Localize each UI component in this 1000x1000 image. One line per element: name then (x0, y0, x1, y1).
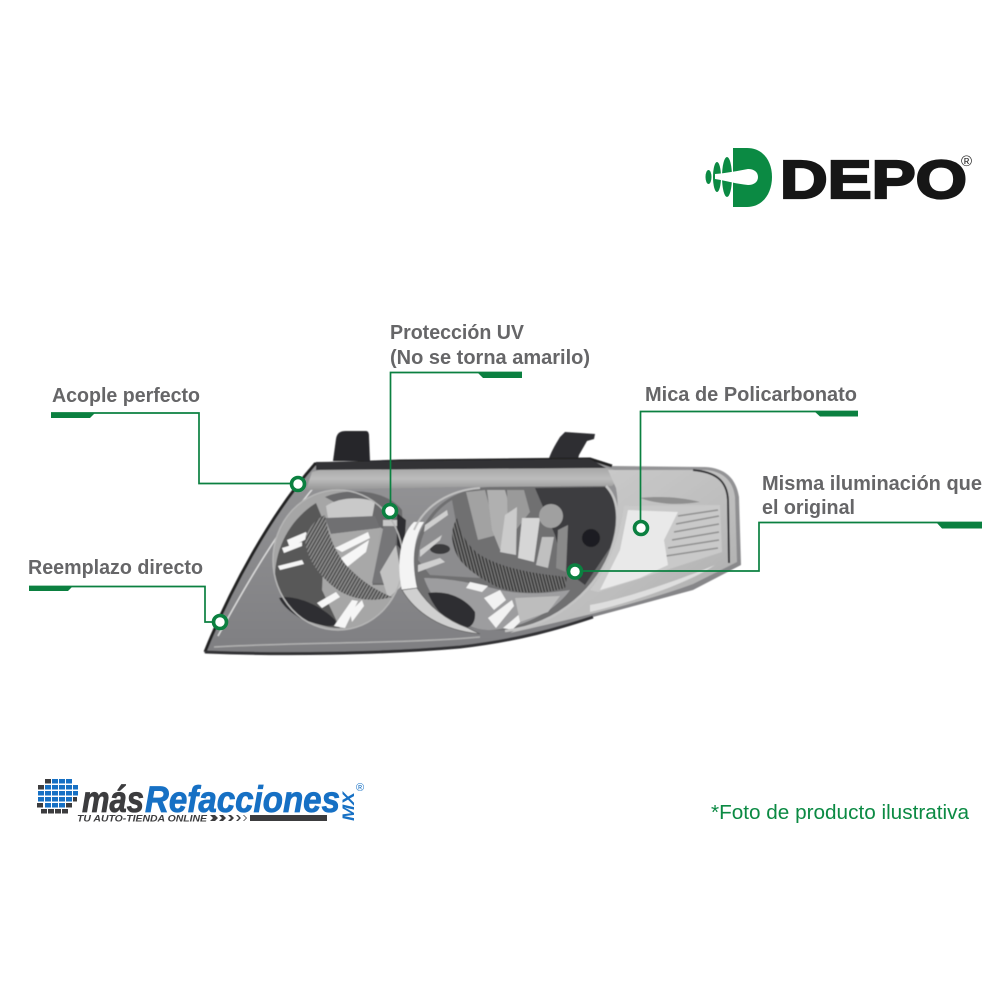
marker dot (292, 478, 304, 490)
callout: Misma iluminación (568, 473, 982, 578)
left right-side dark (397, 513, 406, 553)
callout: Protección UV (384, 322, 590, 518)
logo: masRefacciones (37, 779, 364, 824)
headlight photo illustration (204, 431, 741, 654)
callout label: Protección UV (390, 322, 525, 344)
leader line (640, 412, 858, 522)
right lower grey sheen (515, 596, 560, 622)
corner lens highlight (600, 510, 678, 590)
right fluted arc (452, 518, 567, 593)
marker dot (568, 565, 582, 578)
thick accent (29, 586, 73, 591)
registered mark: ® (961, 153, 972, 170)
right lower reflector (424, 578, 570, 630)
left reflector bowl (273, 490, 403, 630)
callout label: Acople perfecto (52, 385, 200, 407)
leader line (29, 586, 215, 622)
mounting tab: right (548, 432, 595, 463)
chrome ring (399, 522, 424, 590)
mottled light streaks (418, 510, 448, 572)
corner lens (590, 505, 722, 592)
corner lamp dark inner edge (693, 470, 729, 563)
right bowl rim (505, 486, 617, 631)
right bowl dark upper right (535, 487, 616, 585)
right reflector blades (466, 490, 568, 572)
registered mark: ® (356, 782, 364, 794)
thick accent (814, 411, 858, 416)
corner lamp panel (510, 470, 737, 633)
inner trim line (218, 478, 322, 636)
right lower dark bulb housing (428, 592, 475, 628)
left upper dark sweep (325, 491, 404, 585)
leader line (390, 372, 522, 505)
disclaimer note: *Foto de producto ilustrativa (711, 802, 970, 824)
lower dark edge (205, 617, 593, 654)
left reflector dark zones (275, 503, 340, 628)
thick accent (477, 372, 522, 378)
logo: DEPO (706, 148, 972, 210)
marker dot (634, 522, 648, 534)
leader line (51, 413, 292, 484)
outer housing (204, 458, 741, 654)
arrows and bar (210, 815, 327, 821)
callout sublabel: (No se torna amarilo) (390, 347, 590, 369)
bulb reflector (539, 504, 563, 528)
callout label: Mica de Policarbonato (645, 384, 857, 406)
top dark band (316, 459, 606, 470)
left fluted arc (305, 515, 392, 600)
left chrome streaks (278, 532, 370, 628)
left centre panel (331, 528, 380, 588)
MX vertical mark: MX (339, 790, 358, 821)
thick accent (936, 522, 982, 528)
callout: Mica de Policarbonato (634, 384, 858, 534)
corner lens lower sheen (590, 565, 715, 612)
housing black rim (205, 459, 612, 652)
marker dot (214, 616, 226, 628)
callout: Reemplazo directo (28, 557, 226, 628)
marker dot (384, 504, 396, 518)
tagline: TU AUTO-TIENDA ONLINE (77, 814, 208, 824)
lower strip (214, 637, 480, 647)
callout label: Reemplazo directo (28, 557, 203, 579)
wordmark: DEPO (780, 150, 967, 210)
corner lens ribs (666, 510, 719, 556)
thick accent (51, 413, 95, 418)
left upper plate (326, 498, 375, 518)
icon: green lamp mark (706, 148, 772, 207)
dark bulb shield (582, 529, 600, 547)
icon: pixel grid (37, 779, 78, 814)
left strip lower light (380, 545, 403, 598)
top light bar (306, 468, 625, 490)
left dark band (325, 516, 380, 534)
leader line (581, 522, 982, 571)
left bowl outline (273, 490, 403, 630)
wordmark: Refacciones: Refacciones (145, 779, 340, 820)
left inner reflector strip (372, 524, 398, 583)
mounting tab: left (333, 431, 370, 461)
right lower chrome streaks (466, 582, 526, 630)
right reflector bowl (413, 486, 617, 630)
corner dark reflection (640, 497, 700, 504)
wordmark: más: más (82, 779, 144, 820)
mottled dark spot (430, 544, 450, 554)
chrome ring lower (402, 588, 480, 634)
left strip light cap (383, 520, 398, 526)
callout label: Misma iluminación que (762, 473, 982, 495)
callout: Acople perfecto (51, 385, 304, 490)
callout label second line: el original (762, 497, 855, 519)
thin upper ring (414, 488, 480, 530)
left side mottled area (418, 500, 480, 578)
left lower bulb shadow (279, 597, 336, 626)
